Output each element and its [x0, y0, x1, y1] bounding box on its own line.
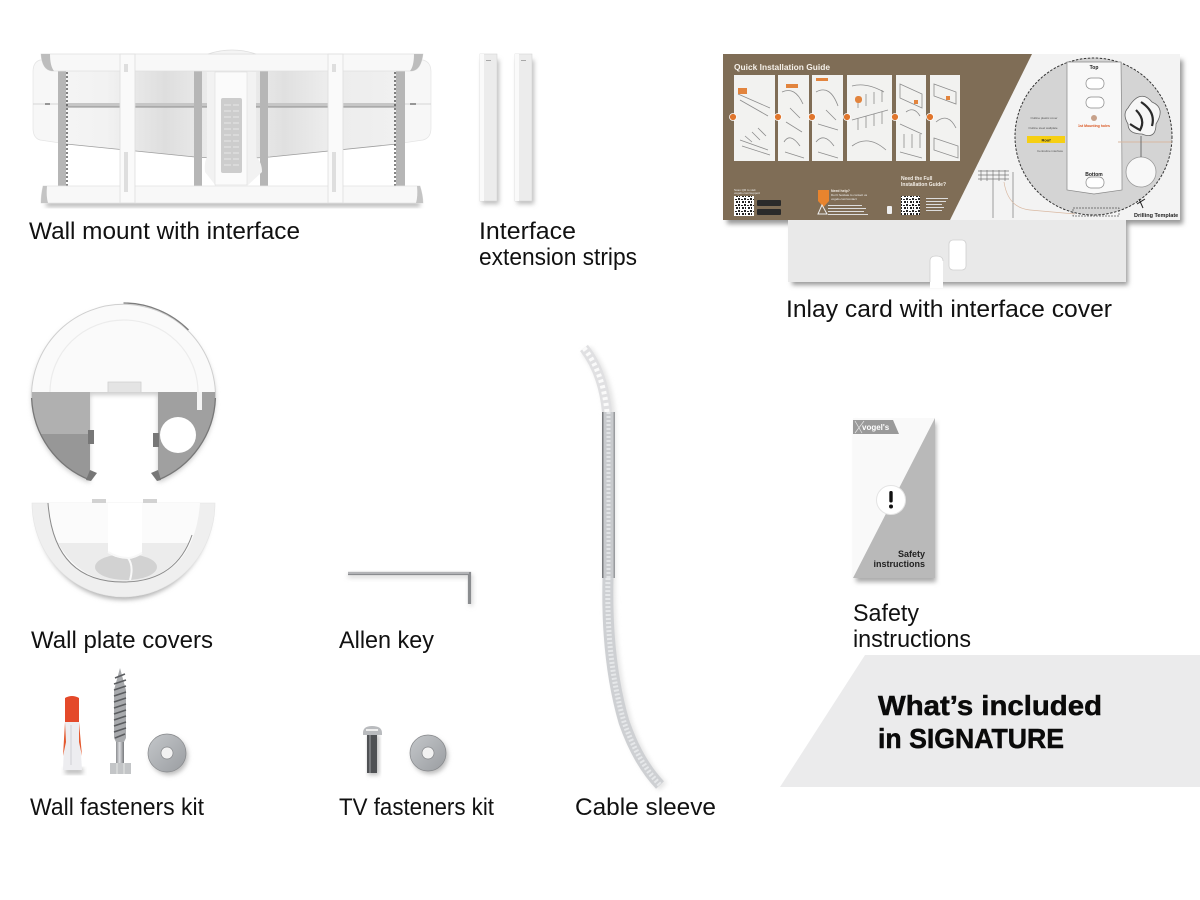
template circle: Bottom: [1085, 172, 1103, 178]
screw: [110, 668, 131, 774]
wing rail marks: [33, 103, 431, 105]
template circle: Top: [1090, 65, 1098, 71]
template circle: [1015, 58, 1172, 216]
white dome: [32, 304, 215, 392]
wall fasteners kit: [63, 668, 188, 775]
template circle: Roof: [1041, 138, 1051, 142]
top handle: [208, 50, 256, 54]
central curved panel: [66, 71, 397, 158]
left wing: [33, 60, 60, 143]
cable sleeve: [584, 348, 663, 787]
inner dome contour: [50, 320, 198, 392]
cable cut-out: [1125, 96, 1160, 136]
QR codes and store badges: [734, 188, 920, 216]
template circle: 1st Mounting holes: [1078, 124, 1110, 128]
washer: [148, 734, 188, 775]
dark rim highlight: [124, 303, 188, 330]
label: allen key: Allen key: [339, 627, 434, 654]
wall plate cover, lower: [32, 499, 215, 600]
top bar end shading: [41, 54, 423, 71]
label: cable sleeve: Cable sleeve: [575, 794, 716, 821]
scissors icon: [1137, 199, 1145, 208]
inlay card with interface cover: [723, 54, 1183, 288]
right wing: [403, 60, 431, 143]
interface extension strips: [480, 54, 534, 204]
lower rim: [32, 398, 215, 480]
label: wall plate covers: Wall plate covers: [31, 627, 213, 654]
template circle: Centreline interface: [1037, 149, 1063, 153]
TV fasteners kit: [363, 726, 448, 775]
label: extension strips: extension strips: [479, 244, 637, 271]
help block: Need help?: [831, 189, 850, 193]
brushed label: [221, 98, 242, 173]
label: wall mount: Wall mount with interface: [29, 218, 300, 245]
wall mount with interface: [33, 50, 431, 207]
dome rim: [32, 304, 215, 392]
label: TV fasteners: TV fasteners kit: [339, 794, 494, 821]
allen key: [348, 573, 471, 606]
perforated rail edges: [67, 72, 395, 186]
help block: [818, 189, 868, 215]
upper clear end: [584, 348, 607, 412]
guide title: Quick Installation Guide: [734, 62, 830, 72]
metal tube section: [602, 412, 615, 578]
mini mount diagram: [978, 170, 1075, 218]
instruction steps: [730, 75, 960, 161]
panel lower edge: [66, 144, 397, 158]
clips: [86, 430, 161, 481]
booklet title: Safety: [898, 549, 925, 559]
vertical uprights: [58, 71, 405, 186]
bottom bar end shading: [41, 186, 423, 203]
interface cover: [788, 220, 1126, 288]
booklet title: instructions: [873, 559, 925, 569]
template circle: Outline plastic cover: [1030, 116, 1058, 120]
banner heading: in SIGNATURE: [878, 723, 1064, 754]
horizontal rail: [66, 103, 398, 108]
help block: Don't hesitate to contact us: [831, 193, 868, 197]
full guide heading: Need the Full: [901, 176, 933, 182]
corrugated body: [608, 578, 660, 785]
top bar: [41, 54, 423, 71]
wall plate cover, upper: [32, 303, 215, 483]
vogel's logo tab: vogel's: [862, 423, 890, 432]
step number badges: [730, 114, 934, 120]
label: safety instructions: instructions: [853, 626, 971, 653]
brown guide panel: [723, 54, 1032, 220]
notch shading: [108, 382, 141, 392]
drilling template sheet: [723, 54, 1180, 220]
banner heading: What’s included: [878, 690, 1102, 721]
help block: vogels.com/contact: [831, 197, 857, 201]
label: wall fasteners: Wall fasteners kit: [30, 794, 204, 821]
label: inlay card: Inlay card with interface cover: [786, 296, 1112, 323]
drilling template caption: Drilling Template: [1134, 213, 1178, 219]
QR codes and store badges: vogels.com/support: [734, 191, 760, 195]
full guide list: [926, 198, 948, 211]
template circle: Outline steel wallplate: [1028, 126, 1058, 130]
centre plate: [205, 72, 262, 186]
QR codes and store badges: Scan QR to visit: [734, 188, 756, 192]
safety instructions booklet: [853, 418, 936, 582]
warning icon: [876, 486, 906, 514]
bolt: [363, 726, 382, 775]
wall plug: [63, 696, 83, 774]
washer: [410, 735, 448, 774]
inlay card with interface cover: Installation Guide?: [901, 182, 946, 188]
interface strips: [120, 54, 343, 203]
banner: [780, 655, 1200, 787]
grey interior: [32, 392, 90, 480]
label: safety instructions: Safety: [853, 600, 919, 627]
bottom bar: [41, 186, 423, 203]
label: extension strips: Interface: [479, 218, 576, 245]
cable hole: [160, 417, 196, 453]
vogel's logo tab: [853, 420, 899, 434]
